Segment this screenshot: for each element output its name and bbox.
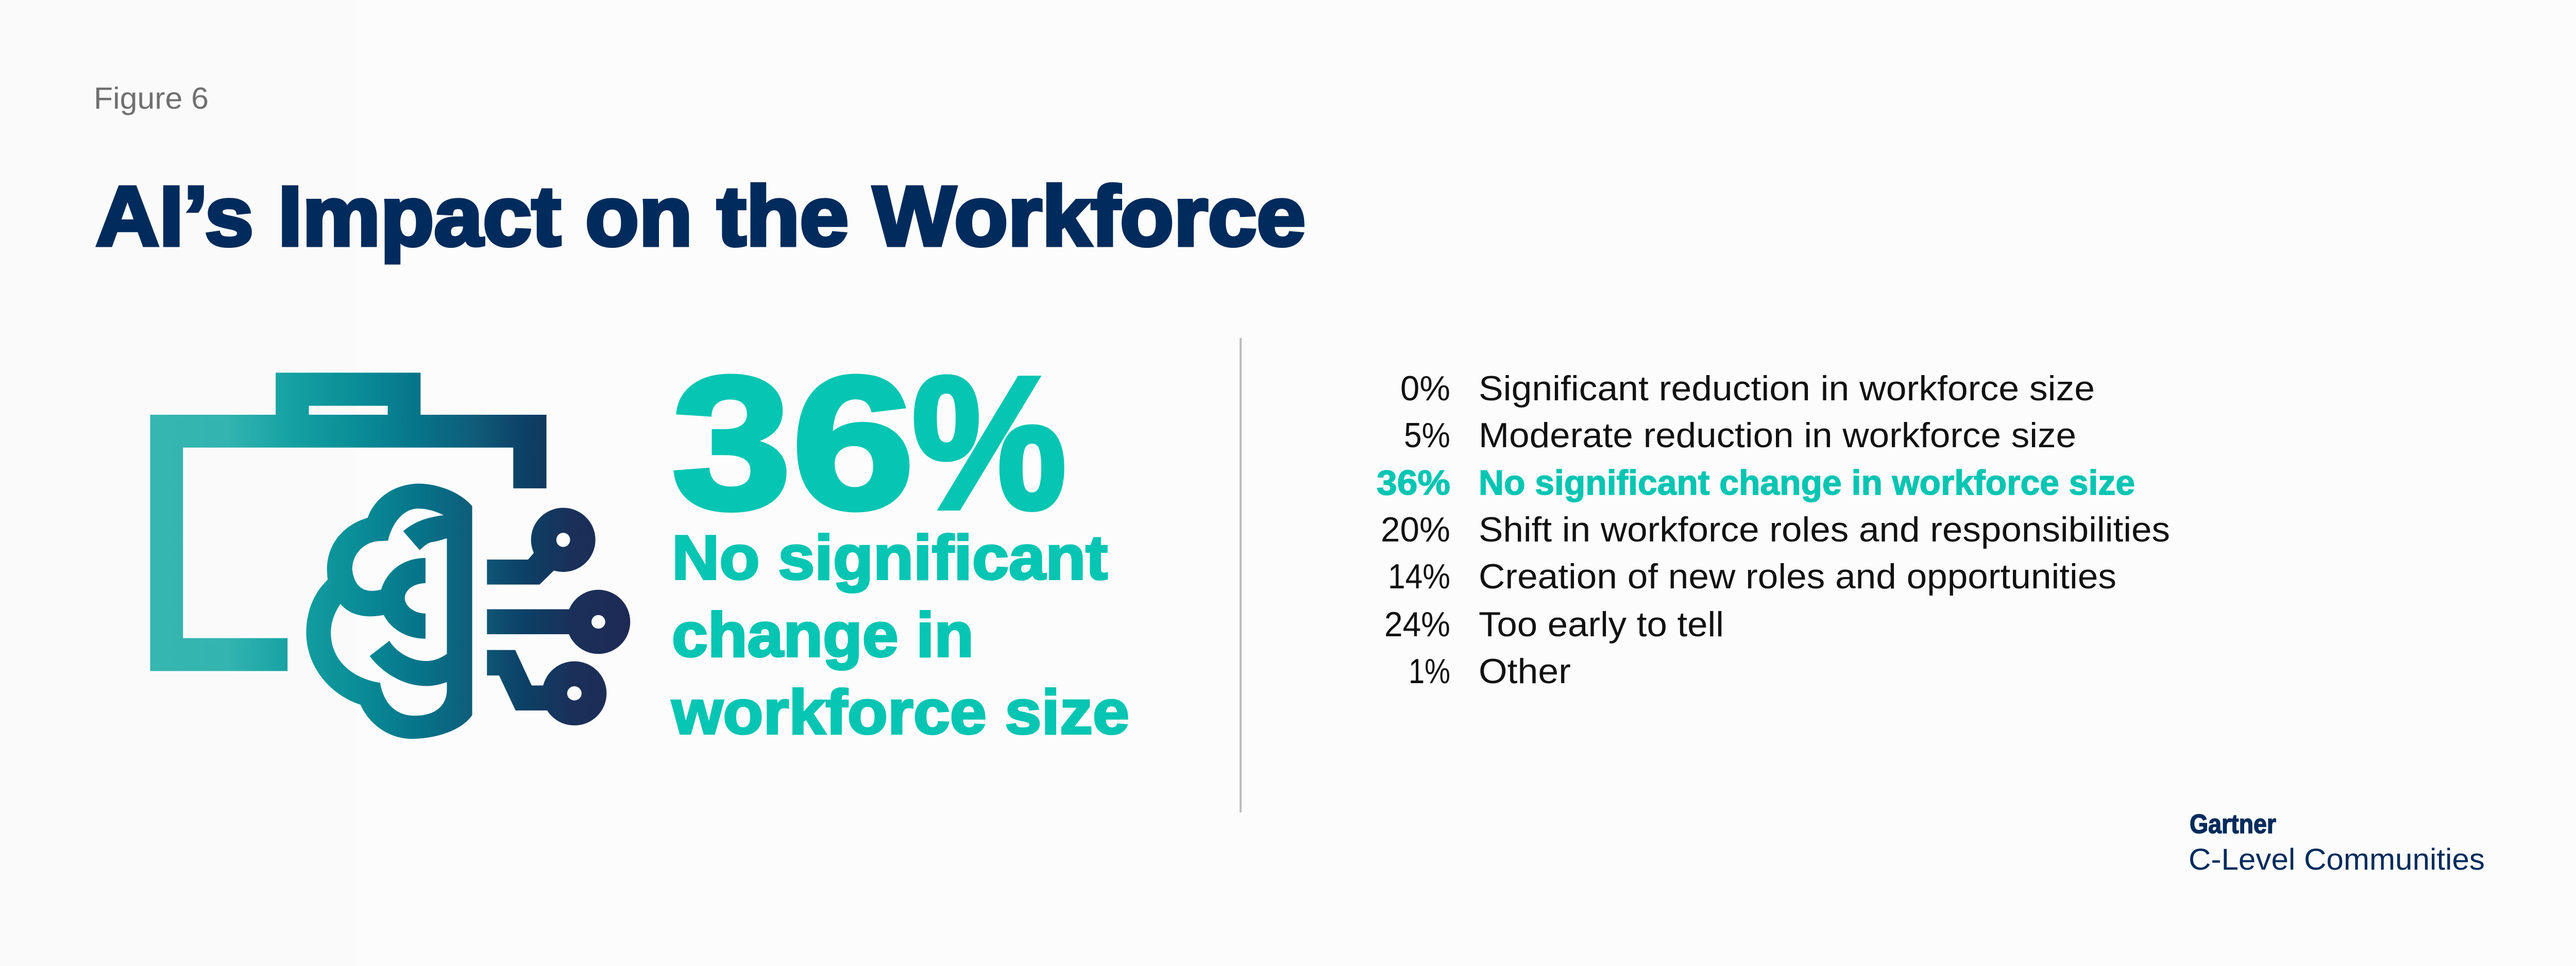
- row: no significant change (highlighted): No significant change in workforce size: [1479, 463, 2135, 502]
- divider: [1240, 338, 1242, 812]
- top circuit node: [487, 508, 596, 585]
- row: too early: Too early to tell: [1479, 605, 1724, 644]
- row: significant reduction: Significant reduction in workforce size: [1479, 369, 2095, 408]
- clipboard outline: [150, 372, 547, 671]
- figure label: Figure 6: [94, 81, 209, 115]
- row: too early: 24%: [1384, 605, 1450, 644]
- brain: [306, 484, 472, 739]
- row: moderate reduction: Moderate reduction in workforce size: [1479, 416, 2076, 455]
- row: other: 1%: [1409, 652, 1450, 691]
- row: too early: [1384, 605, 1724, 644]
- headline description: [671, 522, 1129, 747]
- row: other: [1409, 652, 1571, 691]
- row: shift in roles: 20%: [1381, 510, 1450, 549]
- row: new roles: Creation of new roles and opportunities: [1479, 557, 2116, 596]
- row: new roles: 14%: [1388, 557, 1450, 596]
- row: no significant change (highlighted): 36%: [1377, 463, 1450, 502]
- row: other: Other: [1479, 652, 1571, 691]
- results list: [1377, 369, 2170, 691]
- headline description: workforce size: [671, 677, 1129, 747]
- bottom circuit node: [487, 650, 606, 725]
- middle circuit node: [487, 590, 630, 654]
- icon: clipboard with brain and circuit nodes: [150, 372, 630, 739]
- row: shift in roles: Shift in workforce roles and responsibilities: [1479, 510, 2170, 549]
- headline description: No significant: [672, 522, 1108, 592]
- logo: Gartner C-Level Communities: C-Level Communities: [2189, 843, 2485, 876]
- headline statistic: 6: [792, 337, 914, 548]
- logo: Gartner C-Level Communities: [2189, 809, 2485, 876]
- title: AI’s Impact on the Workforce: [96, 169, 1306, 263]
- row: significant reduction: 0%: [1400, 369, 1450, 408]
- headline description: change in: [672, 600, 974, 670]
- headline statistic: %: [912, 337, 1066, 548]
- headline statistic: 3: [672, 337, 791, 548]
- headline statistic: [672, 337, 1066, 548]
- logo: Gartner C-Level Communities: Gartner: [2190, 809, 2276, 839]
- row: moderate reduction: 5%: [1404, 416, 1450, 455]
